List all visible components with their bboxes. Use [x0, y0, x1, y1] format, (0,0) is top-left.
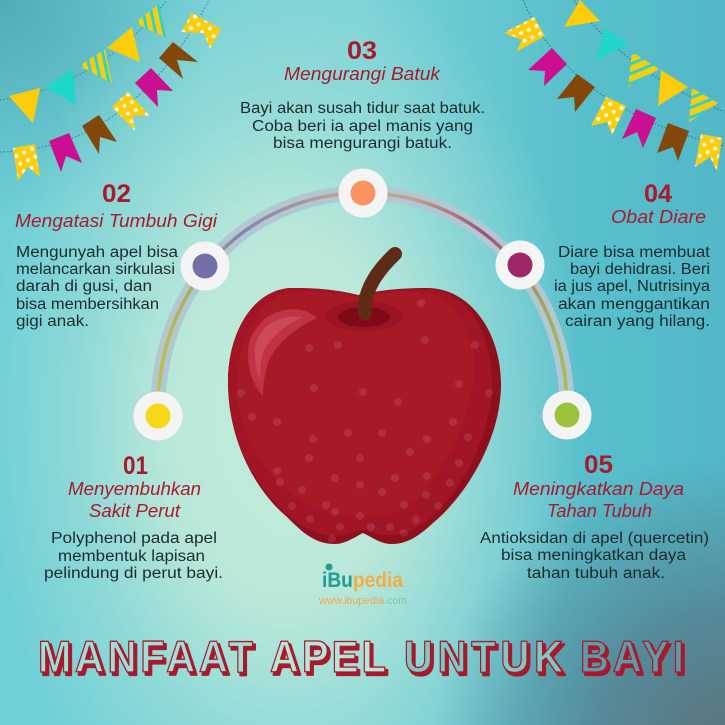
body 04: akan menggantikan — [558, 296, 710, 313]
heading 01: Sakit Perut — [89, 501, 181, 521]
body 01: Polyphenol pada apel — [51, 530, 217, 547]
title shadow: BAYI — [582, 635, 686, 684]
heading 05: Tahan Tubuh — [547, 501, 652, 521]
apple speckles — [237, 299, 493, 543]
heading 04: Obat Diare — [611, 207, 706, 227]
body 03: Bayi akan susah tidur saat batuk. — [240, 100, 485, 117]
node 03: orange — [338, 168, 388, 218]
title face: UNTUK — [404, 632, 563, 681]
title shadow: MANFAAT — [40, 635, 256, 684]
apple dimple — [325, 301, 403, 331]
body 02: gigi anak. — [16, 313, 89, 330]
heading 01: Menyembuhkan — [68, 479, 201, 499]
body 03: Coba beri ia apel manis yang — [252, 118, 473, 135]
body 04: ia jus apel, Nutrisinya — [554, 278, 710, 295]
number 01: 01 — [123, 452, 148, 480]
logo: ibupedia — [318, 564, 407, 607]
apple stem — [365, 254, 395, 313]
icon: mother figure — [326, 564, 332, 570]
node 01: yellow — [134, 392, 182, 440]
logo url: www.ibupedia.com — [318, 595, 407, 607]
heading 03: Mengurangi Batuk — [284, 64, 441, 84]
heading 05: Meningkatkan Daya — [513, 479, 684, 499]
body 04: bayi dehidrasi. Beri — [570, 261, 710, 278]
body 05 — [480, 530, 709, 582]
body 04: Diare bisa membuat — [558, 244, 711, 261]
heading 02: Mengatasi Tumbuh Gigi — [15, 211, 218, 231]
apple highlight inner — [255, 317, 303, 380]
body 02 — [16, 244, 178, 330]
node 02: purple — [180, 242, 230, 290]
title shadow: APEL — [272, 635, 388, 684]
title face — [38, 632, 684, 681]
apple outer shape — [228, 288, 501, 544]
apple dimple inner — [338, 307, 390, 327]
title shadow: UNTUK — [406, 635, 566, 684]
number 05: 05 — [584, 451, 613, 479]
apple illustration — [228, 254, 501, 544]
node 05: green — [542, 390, 592, 440]
body 01: membentuk lapisan — [58, 548, 205, 565]
apple inner band — [228, 288, 492, 536]
body 02: bisa membersihkan — [16, 296, 159, 313]
number 02: 02 — [102, 180, 131, 208]
body 02: darah di gusi, dan — [16, 278, 152, 295]
heading 01 — [68, 479, 201, 521]
apple face — [237, 292, 474, 515]
number 04: 04 — [644, 180, 672, 208]
body 03: bisa mengurangi batuk. — [273, 135, 452, 152]
body 02: Mengunyah apel bisa — [16, 244, 178, 261]
node 04: magenta — [496, 240, 544, 290]
body 05: Antioksidan di apel (quercetin) — [480, 530, 709, 547]
body 01 — [44, 530, 223, 582]
title face: MANFAAT — [38, 632, 253, 681]
body 05: tahan tubuh anak. — [527, 565, 665, 582]
timeline arc — [158, 193, 567, 416]
panel: 05 Meningkatkan Daya Tahan Tubuh — [480, 451, 709, 582]
panel: 02 Mengatasi Tumbuh Gigi — [15, 180, 218, 330]
title face: BAYI — [580, 632, 684, 681]
title face: APEL — [270, 632, 386, 681]
panel: 03 Mengurangi Batuk — [240, 37, 485, 152]
bunting: top left — [0, 0, 221, 181]
body 05: bisa meningkatkan daya — [501, 547, 686, 564]
panel: 01 Menyembuhkan Sakit Perut — [44, 452, 223, 582]
title — [38, 632, 686, 684]
body 04 — [554, 244, 711, 330]
panel: 04 Obat Diare — [554, 180, 711, 330]
title shadow — [40, 635, 686, 684]
body 04: cairan yang hilang. — [565, 313, 710, 330]
apple highlight — [248, 309, 317, 396]
bunting: top right — [504, 0, 725, 171]
body 01: pelindung di perut bayi. — [44, 565, 223, 582]
body 02: melancarkan sirkulasi — [16, 261, 175, 278]
heading 05 — [513, 479, 684, 521]
logo wordmark: iBupedia — [322, 569, 403, 592]
number 03: 03 — [347, 37, 377, 65]
body 03 — [240, 100, 485, 152]
